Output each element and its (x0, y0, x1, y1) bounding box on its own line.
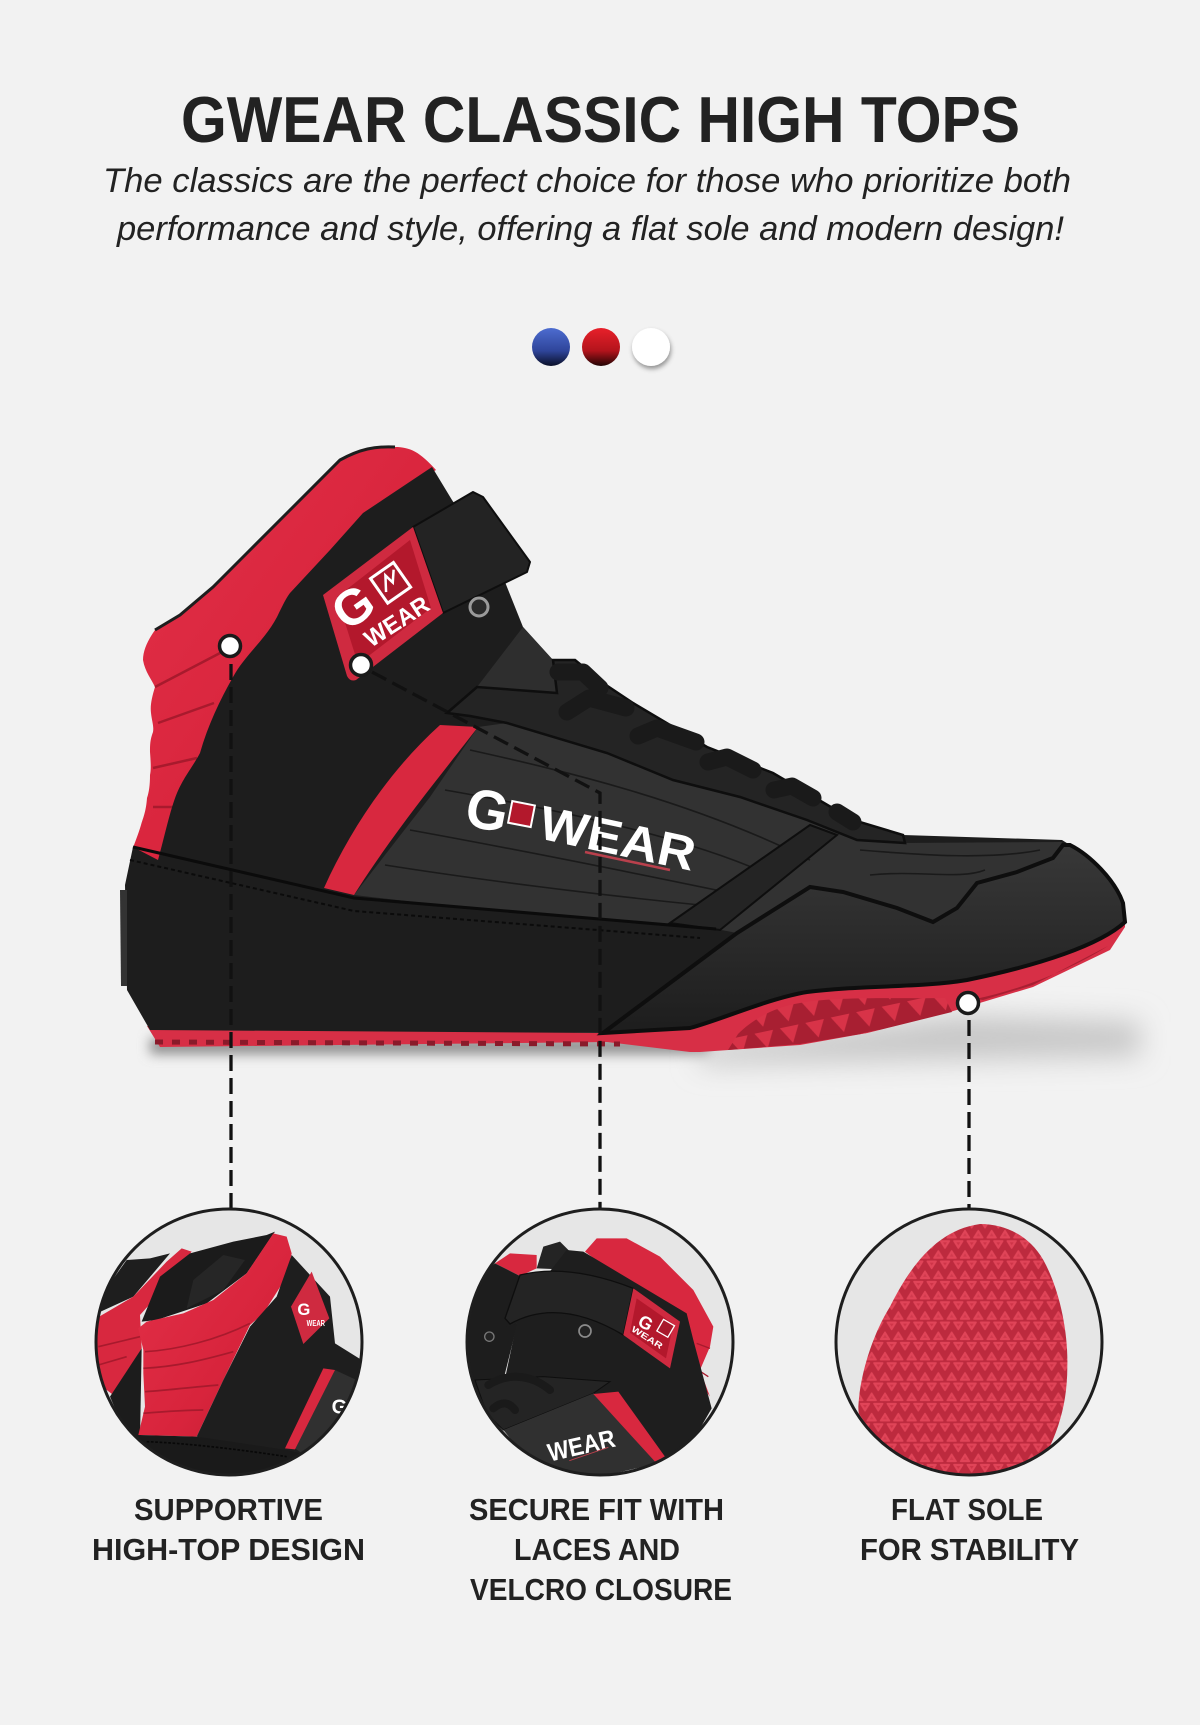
leader line: closure (372, 672, 600, 1208)
marker dot: sole (958, 992, 978, 1014)
detail circle: closure: G (635, 1311, 657, 1335)
heel tab (120, 890, 127, 986)
toe overlay (603, 845, 1125, 1033)
colour swatches (532, 328, 670, 366)
caption: closure: LACES AND (514, 1532, 680, 1567)
leader line: high-top (229, 664, 233, 1208)
sole (147, 920, 1125, 1052)
caption: closure: SECURE FIT WITH (469, 1492, 724, 1527)
mesh side band (670, 825, 837, 930)
black upper silhouette (125, 467, 1125, 1033)
caption: flat sole: FLAT SOLE (891, 1492, 1043, 1527)
side logo: G (461, 775, 514, 845)
subtitle (103, 162, 1071, 248)
detail circle: high-top (93, 1209, 362, 1477)
subtitle: performance and style, offering a flat sole and modern design! (116, 210, 1065, 248)
patch box (371, 563, 411, 603)
caption: high-top: SUPPORTIVE (134, 1492, 323, 1527)
detail circle: flat sole (836, 1209, 1102, 1477)
detail circle: high-top: WEAR (307, 1319, 325, 1328)
shoe (120, 447, 1140, 1064)
leader line: sole (967, 1020, 971, 1208)
detail circle: closure (463, 1209, 733, 1477)
ground shadow (150, 1016, 1140, 1064)
caption: closure (469, 1492, 732, 1607)
marker dot: strap (350, 654, 372, 676)
side logo: WEAR (535, 797, 700, 882)
red stripe (324, 725, 478, 895)
red collar (133, 447, 436, 868)
detail circle: closure: WEAR (545, 1425, 618, 1468)
logo patch (321, 527, 443, 680)
mesh panel (354, 723, 1062, 933)
detail circle: high-top: G (297, 1300, 310, 1319)
marker dot: collar (220, 636, 240, 656)
patch monogram G: G (321, 573, 385, 641)
caption: closure: VELCRO CLOSURE (470, 1572, 732, 1607)
tongue mesh (477, 627, 600, 693)
detail circle: high-top: G (332, 1396, 347, 1418)
heel seam stitching (130, 847, 716, 938)
eyestay (447, 660, 905, 843)
title: GWEAR CLASSIC HIGH TOPS (181, 83, 1020, 156)
strap (413, 492, 530, 613)
patch wear text: WEAR (360, 591, 435, 653)
caption: high-top (92, 1492, 365, 1567)
caption: flat sole: FOR STABILITY (860, 1532, 1079, 1567)
subtitle: The classics are the perfect choice for those who prioritize both (103, 162, 1071, 200)
laces (558, 672, 853, 822)
grommet (470, 598, 488, 616)
caption: high-top: HIGH-TOP DESIGN (92, 1532, 365, 1567)
caption: flat sole (860, 1492, 1079, 1567)
detail circle: closure: WEAR (630, 1324, 665, 1351)
side logo (461, 775, 700, 882)
